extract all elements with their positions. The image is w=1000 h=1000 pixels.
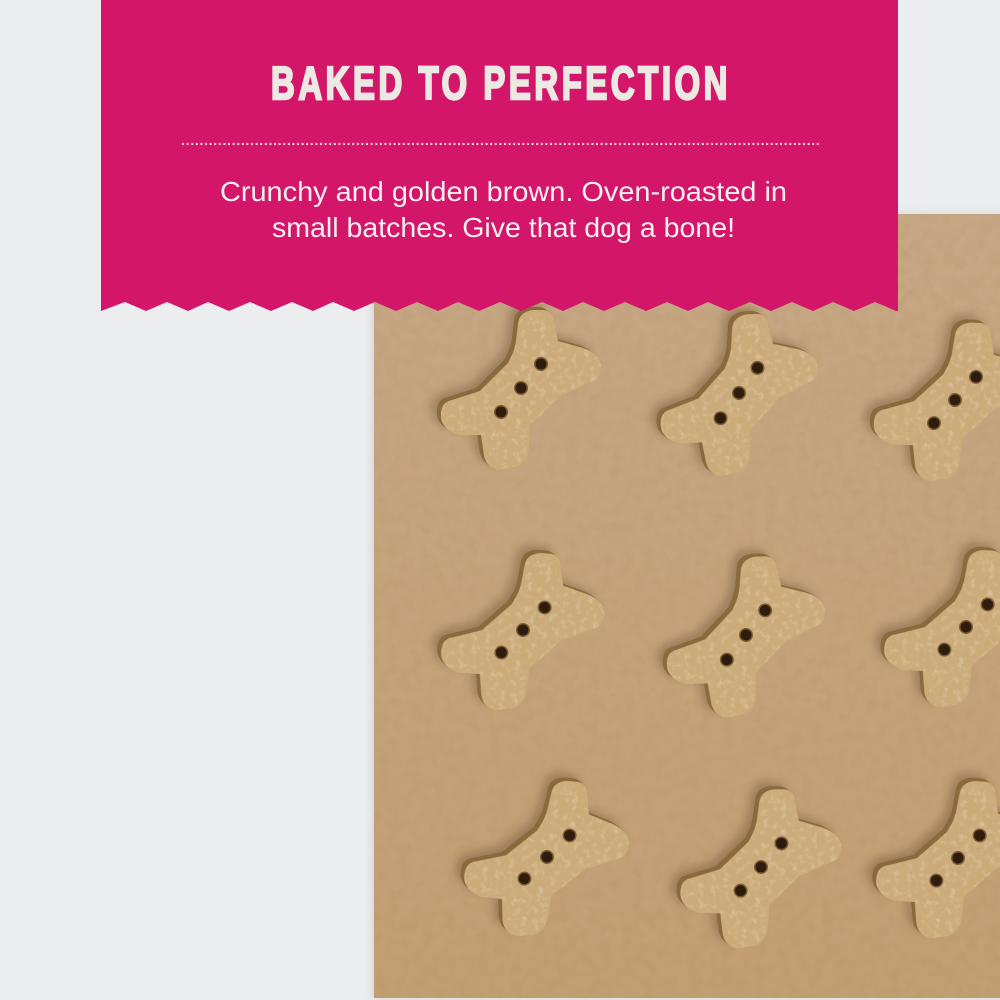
biscuit row 2 column 2: [654, 547, 829, 720]
panel: kraft baking paper: [372, 214, 1000, 998]
panel: pink zigzag banner: [101, 0, 898, 311]
biscuit row 1 column 3: [862, 311, 1000, 485]
biscuit row 2 column 1: [428, 539, 609, 717]
dog biscuits grid: [428, 303, 1000, 950]
body text: [220, 176, 787, 243]
title: BAKED TO PERFECTION: [271, 57, 731, 109]
biscuit row 1 column 2: [645, 303, 824, 480]
biscuit row 3 column 2: [670, 780, 842, 950]
biscuit row 2 column 3: [871, 536, 1000, 714]
biscuit row 1 column 1: [432, 303, 601, 470]
biscuit row 3 column 3: [863, 767, 1000, 945]
biscuit row 3 column 1: [449, 762, 636, 948]
body line 1: Crunchy and golden brown. Oven-roasted in: [220, 176, 787, 207]
body line 2: small batches. Give that dog a bone!: [272, 212, 735, 243]
dotted divider: [183, 143, 818, 145]
banner shape: [101, 0, 898, 311]
